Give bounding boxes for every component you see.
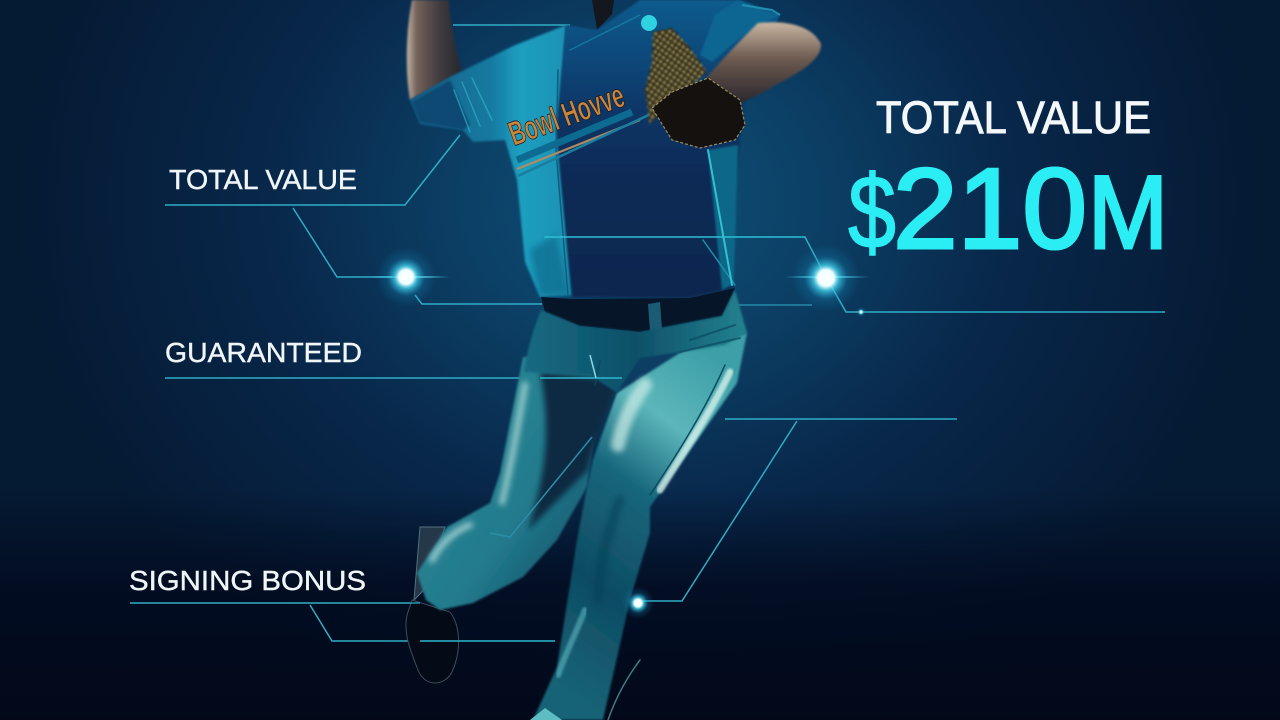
- shadowed inner thigh: [528, 372, 620, 530]
- glow node: lower leg: [622, 587, 654, 619]
- jersey lettering stripes: [517, 112, 655, 176]
- jersey belly shade: [530, 235, 570, 296]
- glove pocket and hand: [652, 78, 745, 148]
- player figure: [406, 0, 821, 720]
- jersey left panel and sleeve: [410, 25, 572, 297]
- sleeve shade: [412, 80, 470, 130]
- sleeve band: [742, 5, 780, 15]
- label: guaranteed: GUARANTEED: [165, 337, 362, 368]
- label: total value left: TOTAL VALUE: [169, 164, 357, 195]
- right sleeve: [700, 0, 780, 62]
- belt tab: [648, 302, 662, 331]
- front foot hint: [530, 708, 562, 720]
- forearm: [680, 22, 821, 114]
- glow node: left: [370, 247, 450, 307]
- jersey folds: [454, 15, 805, 295]
- jersey lettering: Bowl Hovve: [504, 77, 629, 154]
- value: $210M: $: [848, 155, 896, 271]
- value: $210M: M: [1088, 155, 1168, 271]
- glow node: right: [784, 244, 870, 312]
- pants waist: [524, 290, 747, 393]
- belt: [541, 288, 735, 332]
- front leg: [533, 333, 747, 720]
- heading: total value: TOTAL VALUE: [876, 92, 1151, 143]
- glow node: collar dot: [641, 15, 657, 31]
- leader lines over player: [407, 304, 622, 641]
- jersey dark panel: [556, 0, 780, 298]
- back leg: [417, 357, 596, 610]
- jersey side panel: [708, 145, 738, 290]
- value: $210M: [848, 146, 1168, 273]
- glow node: line tick: [856, 307, 866, 317]
- rear shoe: [406, 527, 459, 683]
- leader lines behind player: [130, 25, 1165, 641]
- neck: [592, 0, 614, 30]
- raised throwing arm: [407, 0, 462, 100]
- label: signing bonus: SIGNING BONUS: [129, 565, 366, 596]
- pant highlights: [432, 325, 740, 720]
- value: $210M: 210: [893, 146, 1087, 273]
- glove: [645, 28, 707, 125]
